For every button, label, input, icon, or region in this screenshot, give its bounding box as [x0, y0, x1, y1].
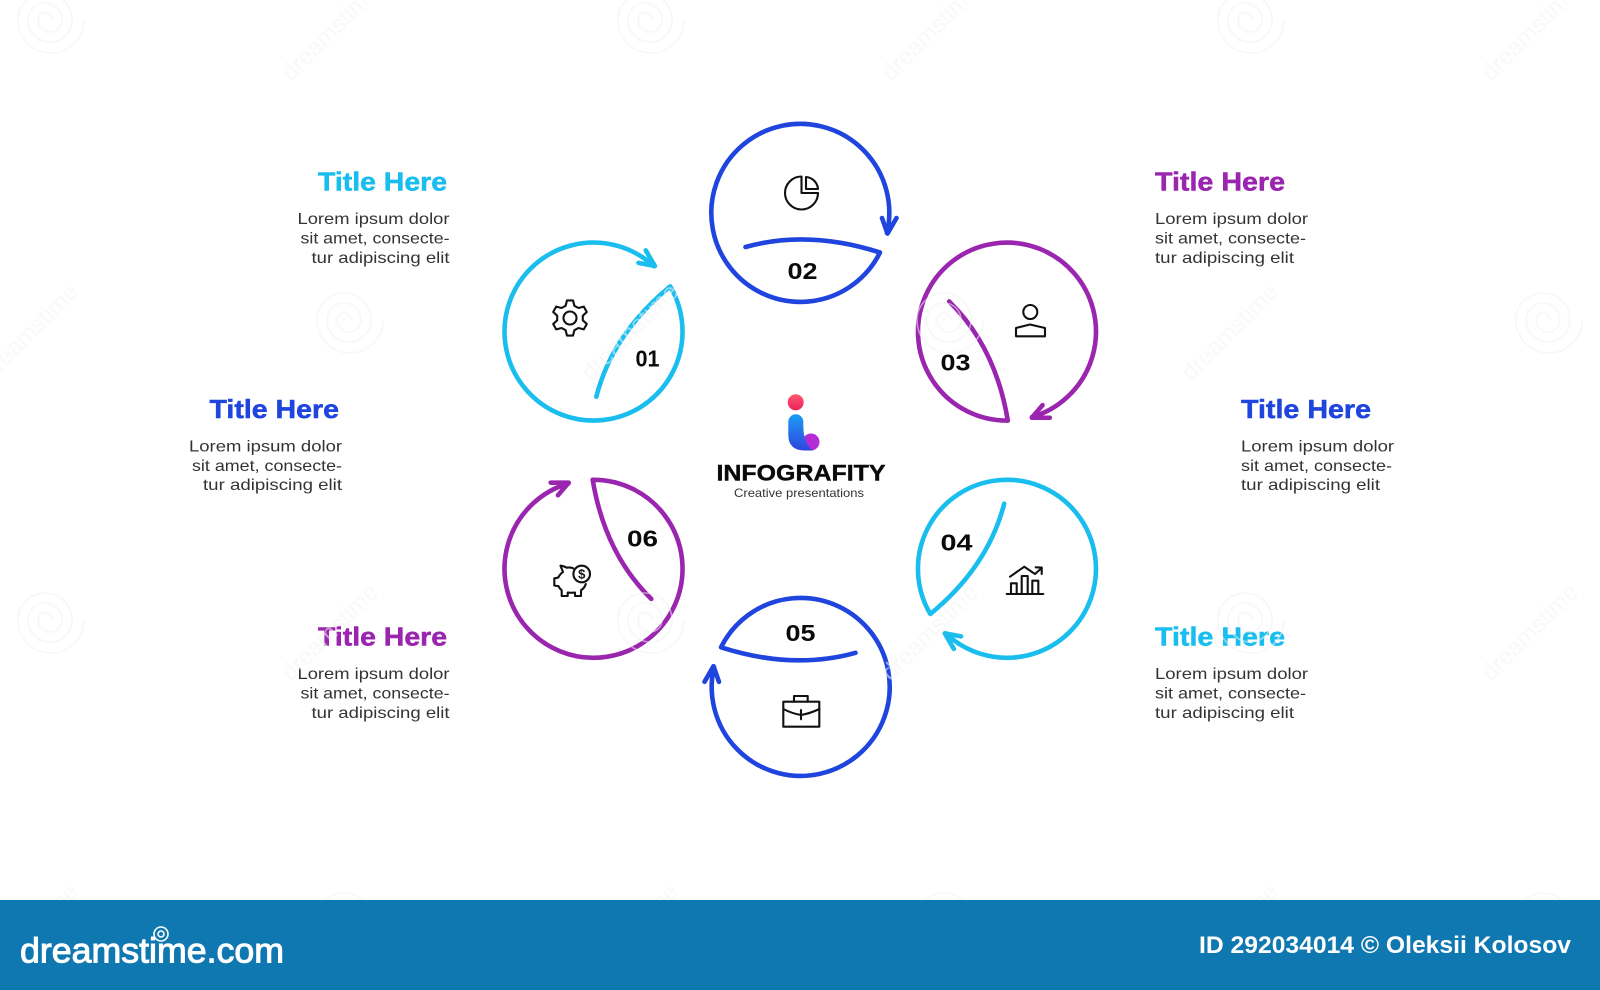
body [1155, 666, 1309, 722]
step 03 ring with arrow [885, 210, 1132, 459]
number 03: 03 [940, 350, 970, 376]
watermark overlay: dreamstime [1176, 878, 1284, 986]
text block: middle right [1241, 394, 1395, 494]
step 01 ring with arrow [472, 204, 719, 453]
number 05: 05 [786, 620, 816, 646]
body: sit amet, consecte- [192, 458, 342, 475]
image credit: ID 292034014 © Oleksii Kolosov [1199, 932, 1572, 959]
text block: middle left [189, 394, 343, 494]
center logo: Infografity [716, 394, 886, 500]
watermark overlay: dreamstime [276, 578, 384, 686]
step 04 ring with arrow [882, 447, 1129, 696]
body [298, 666, 450, 722]
body: sit amet, consecte- [1241, 458, 1392, 475]
icon: growth chart [1007, 567, 1043, 594]
step 02 ring with arrow [711, 124, 896, 302]
brand name: INFOGRAFITY [716, 461, 886, 486]
footer bar [0, 900, 1600, 990]
body [189, 439, 343, 494]
body: tur adipiscing elit [1155, 705, 1295, 722]
icon: piggy bank: $ [578, 567, 586, 582]
watermark overlay: dreamstime [576, 278, 684, 386]
text block: bottom right [1155, 622, 1309, 722]
step 05 ring with arrow [704, 598, 890, 776]
body: tur adipiscing elit [203, 477, 343, 494]
body: tur adipiscing elit [312, 705, 450, 722]
text block: top left [298, 167, 450, 267]
number 02: 02 [788, 258, 818, 284]
icon: person [1016, 305, 1045, 336]
icon: gear [553, 300, 587, 336]
footer logo swirl [154, 927, 168, 941]
body [1241, 439, 1395, 494]
watermark overlay: dreamstime [1476, 578, 1584, 686]
body [1155, 211, 1309, 267]
number 01: 01 [636, 346, 660, 372]
title: Title Here [318, 167, 447, 197]
body: Lorem ipsum dolor [298, 666, 450, 683]
text block: bottom left [298, 622, 450, 722]
title: Title Here [1155, 622, 1285, 652]
logo dot [788, 394, 804, 410]
step 06 ring with arrow [468, 441, 715, 690]
watermark overlay: dreamstime [1176, 278, 1284, 386]
body [298, 211, 450, 267]
logo foot [802, 434, 820, 450]
icon: pie chart [785, 176, 818, 210]
icon: piggy bank [554, 566, 590, 596]
body: tur adipiscing elit [1241, 477, 1381, 494]
title: Title Here [210, 394, 339, 424]
title: Title Here [1241, 394, 1371, 424]
body: sit amet, consecte- [1155, 231, 1306, 248]
number 06: 06 [627, 526, 658, 552]
body: sit amet, consecte- [300, 686, 450, 703]
body: Lorem ipsum dolor [189, 439, 343, 456]
tagline: Creative presentations [734, 486, 864, 500]
body: Lorem ipsum dolor [1155, 666, 1309, 683]
body: Lorem ipsum dolor [1155, 211, 1309, 228]
title: Title Here [318, 622, 447, 652]
watermark overlay: dreamstime [576, 878, 684, 986]
body: tur adipiscing elit [312, 250, 450, 267]
number 04: 04 [940, 530, 973, 556]
text block: top right [1155, 167, 1309, 267]
watermark overlay: dreamstime [876, 578, 984, 686]
body: Lorem ipsum dolor [1241, 439, 1395, 456]
body: tur adipiscing elit [1155, 250, 1295, 267]
footer logo text: dreamstime.com [20, 932, 284, 971]
title: Title Here [1155, 167, 1285, 197]
icon: briefcase [783, 696, 819, 727]
logo stem [788, 414, 813, 450]
body: Lorem ipsum dolor [298, 211, 450, 228]
body: sit amet, consecte- [1155, 686, 1306, 703]
body: sit amet, consecte- [300, 231, 450, 248]
